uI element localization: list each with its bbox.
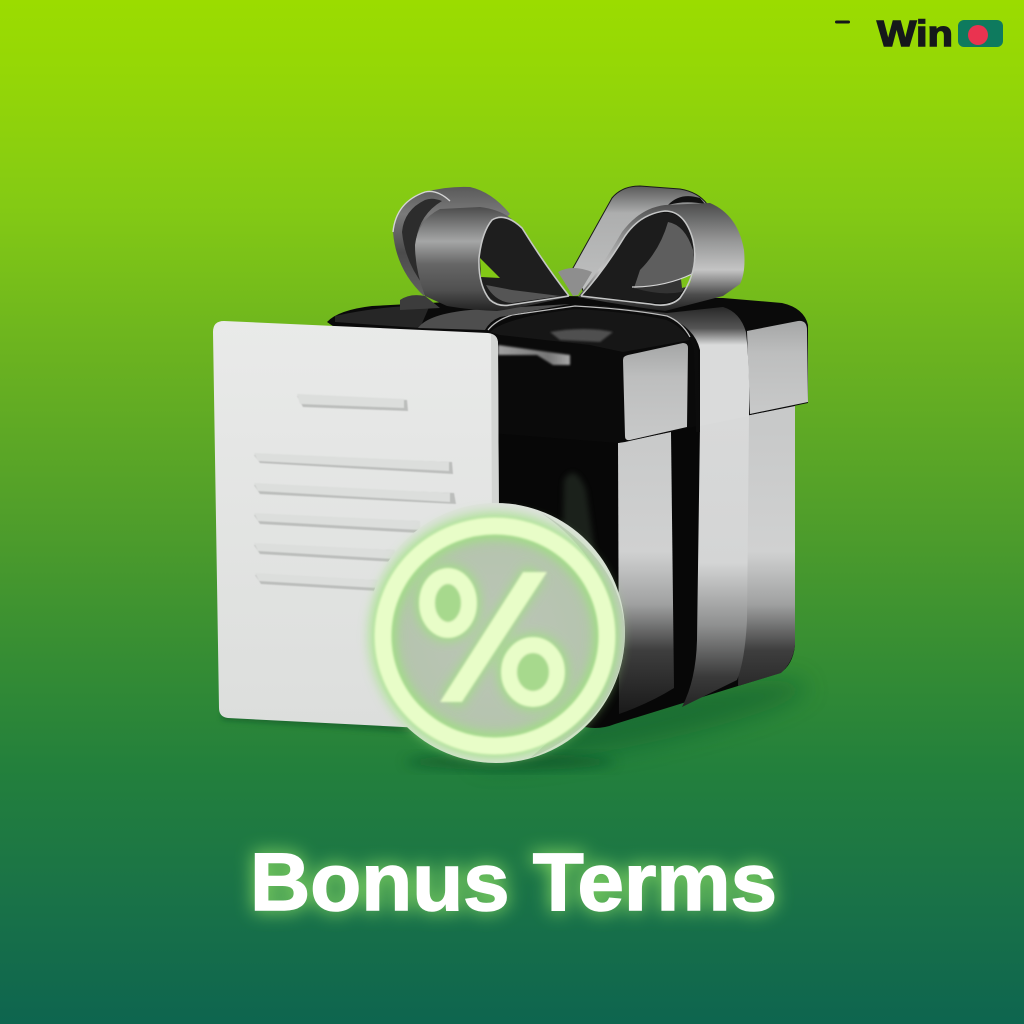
title text: Bonus Terms [250,837,777,928]
logo wordmark: Win [877,13,953,54]
percent coin [367,503,625,770]
lid silhouette [327,296,808,443]
vertical ribbon [682,415,749,707]
lid top surface [490,308,690,352]
lid left dark surface [335,305,430,328]
brand logo [835,13,1003,54]
line 2 [254,483,456,504]
text lines on sheet [254,394,456,591]
bow back right [573,186,707,295]
coin edge [367,503,625,763]
line 4 [254,543,395,562]
line 3 [254,513,420,533]
floor shadow [469,665,811,779]
line 5 [255,573,378,591]
body front-right face [618,432,674,714]
lid silver face [623,343,688,440]
left loop inside [479,217,569,305]
right loop gap [681,274,693,288]
icon: Bangladesh flag [958,20,1003,47]
ribbon over lid [590,305,749,426]
bow [393,186,744,311]
lid front highlight [498,345,570,365]
logo dash [835,20,850,24]
right loop inside [582,212,695,304]
lid right face [747,321,808,414]
sheet body [213,321,500,732]
left loop gap [480,258,500,278]
document sheet [213,321,500,738]
coin shadow [405,754,615,770]
title [250,837,777,928]
line 1 [254,453,453,474]
percent glyph [427,572,557,702]
glow ring [383,526,607,746]
gift box [327,186,808,728]
sheet shadow [222,712,500,738]
sheet right edge [491,334,500,732]
ribbon edge over lid [487,307,698,432]
glow ring halo [383,526,607,746]
bow knot [558,268,592,296]
coin face [380,523,610,749]
body right face [738,406,795,686]
bow back left [393,187,510,296]
box body [490,400,795,728]
title glow: Bonus Terms [250,837,777,928]
bow left loop [415,207,569,311]
box lid [327,295,808,443]
ribbon left on lid [418,304,570,330]
title line [297,394,408,411]
glossy reflection [562,473,596,560]
bow right loop [578,203,744,311]
